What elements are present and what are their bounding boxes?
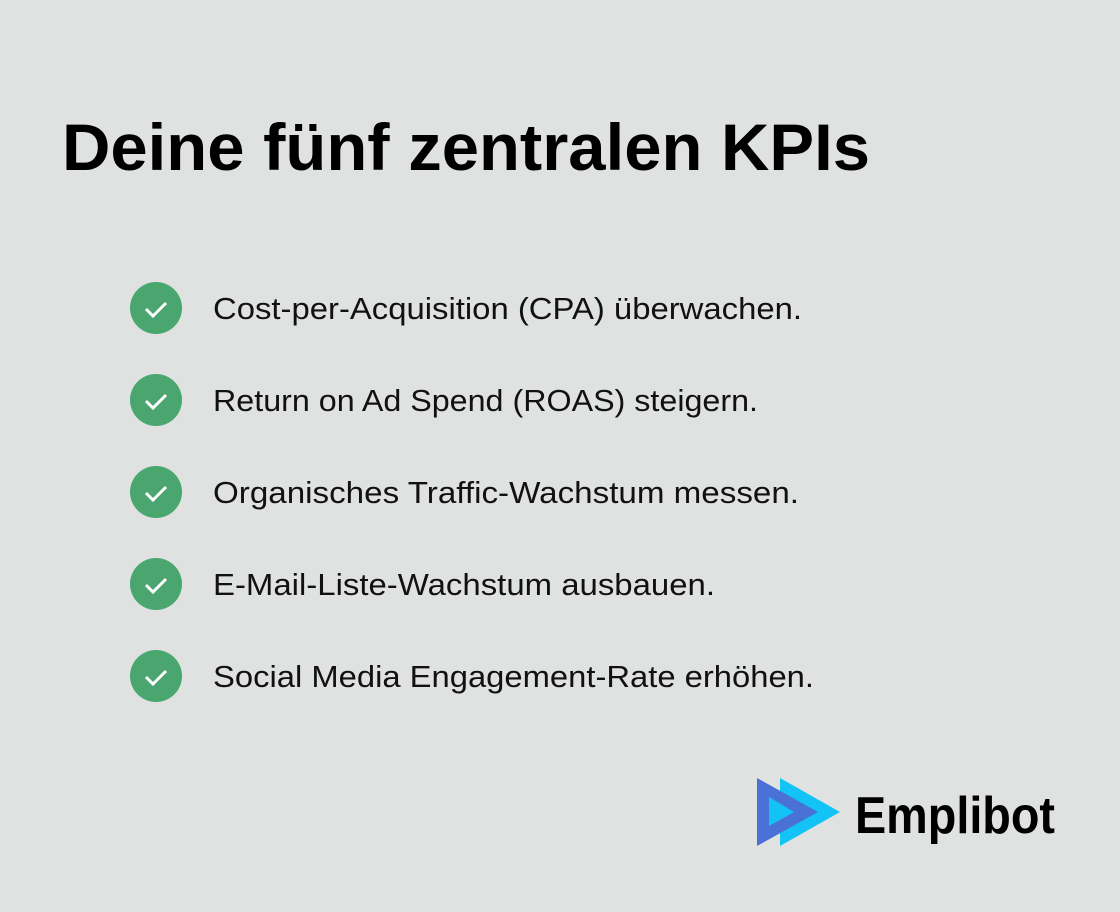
item 2: Return on Ad Spend (ROAS) steigern.	[213, 383, 758, 418]
item 5: Social Media Engagement-Rate erhöhen.	[213, 659, 814, 694]
item 4: E-Mail-Liste-Wachstum ausbauen.	[213, 567, 715, 602]
icon: play triangles	[757, 778, 840, 846]
item 4	[130, 558, 715, 610]
item 3: Organisches Traffic-Wachstum messen.	[213, 475, 799, 510]
list of KPIs	[130, 282, 814, 702]
title: Deine fünf zentralen KPIs	[62, 110, 870, 184]
item 3	[130, 466, 799, 518]
logo: Emplibot	[757, 778, 1055, 846]
item 1: Cost-per-Acquisition (CPA) überwachen.	[213, 291, 802, 326]
item 1	[130, 282, 802, 334]
item 2	[130, 374, 758, 426]
logo: Emplibot: Emplibot	[855, 787, 1055, 845]
item 5	[130, 650, 814, 702]
